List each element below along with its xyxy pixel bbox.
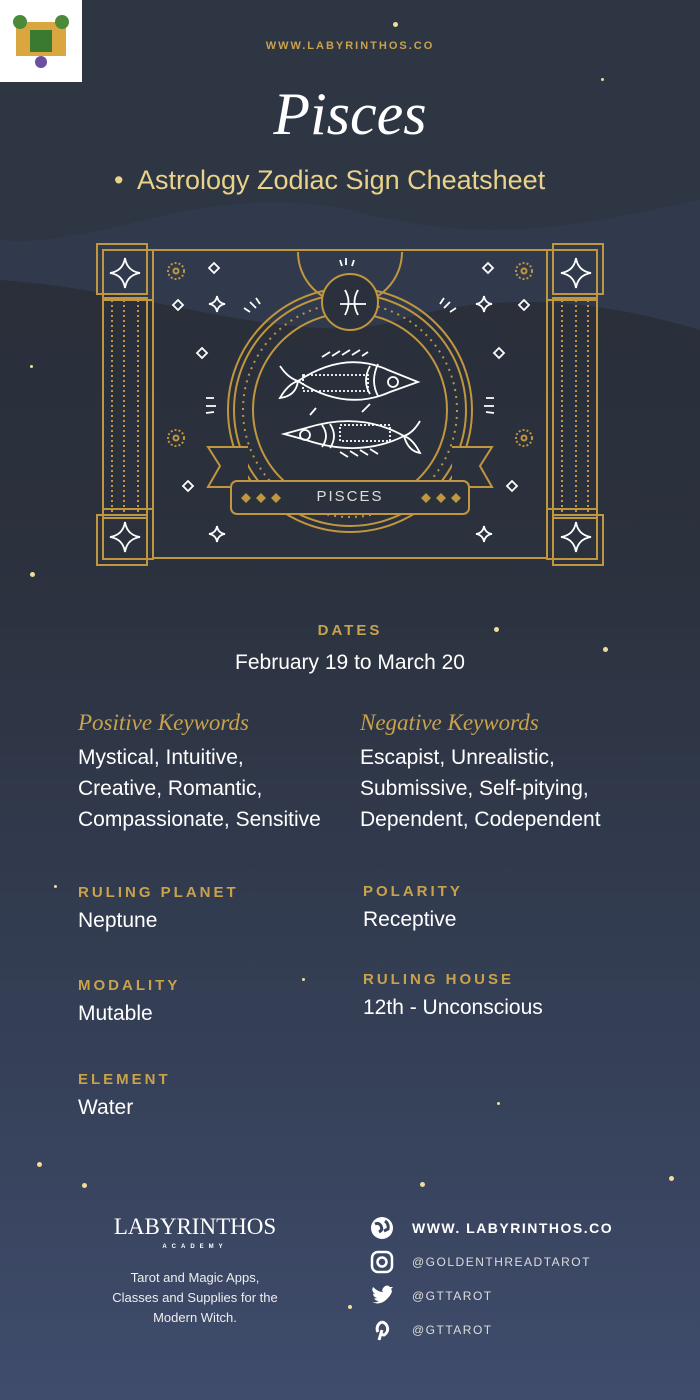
footer brand: ACADEMY [162, 1244, 228, 1250]
modality [78, 977, 180, 1025]
ruling planet [78, 884, 239, 932]
ruling house: RULING HOUSE [363, 971, 514, 988]
modality: Mutable [78, 1002, 153, 1025]
polarity: POLARITY [363, 883, 463, 900]
footer social links: @GOLDENTHREADTAROT [412, 1255, 591, 1269]
modality: MODALITY [78, 977, 180, 994]
ruling planet: Neptune [78, 909, 157, 932]
footer brand: Tarot and Magic Apps, [131, 1270, 259, 1285]
footer brand: Modern Witch. [153, 1310, 237, 1325]
footer social links: @GTTAROT [412, 1323, 493, 1337]
element: ELEMENT [78, 1071, 171, 1088]
ruling planet: RULING PLANET [78, 884, 239, 901]
element: Water [78, 1096, 133, 1119]
decorative dots [393, 22, 398, 27]
footer brand: LABYRINTHOS [114, 1214, 276, 1239]
banner label: PISCES [316, 488, 384, 505]
footer brand [112, 1214, 278, 1325]
negative keywords [360, 710, 601, 831]
positive keywords: Mystical, Intuitive, [78, 746, 244, 769]
ruling house [363, 971, 543, 1019]
positive keywords: Creative, Romantic, [78, 777, 262, 800]
dates [235, 622, 465, 674]
site url: WWW.LABYRINTHOS.CO [266, 40, 434, 52]
footer brand: Classes and Supplies for the [112, 1290, 278, 1305]
negative keywords: Dependent, Codependent [360, 808, 601, 831]
positive keywords: Compassionate, Sensitive [78, 808, 321, 831]
ruling house: 12th - Unconscious [363, 996, 543, 1019]
footer social links: WWW. LABYRINTHOS.CO [412, 1220, 613, 1236]
illustration: pisces frame [96, 243, 604, 566]
negative keywords: Submissive, Self-pitying, [360, 777, 589, 800]
element [78, 1071, 171, 1119]
dates: February 19 to March 20 [235, 651, 465, 674]
title: Pisces [273, 81, 427, 147]
polarity [363, 883, 463, 931]
negative keywords: Negative Keywords [360, 710, 539, 735]
subtitle: • Astrology Zodiac Sign Cheatsheet [114, 165, 545, 195]
footer social links: @GTTAROT [412, 1289, 493, 1303]
positive keywords: Positive Keywords [78, 710, 249, 735]
logo badge [0, 0, 82, 82]
polarity: Receptive [363, 908, 456, 931]
positive keywords [78, 710, 321, 831]
dates: DATES [318, 622, 382, 639]
negative keywords: Escapist, Unrealistic, [360, 746, 555, 769]
footer social links [370, 1217, 613, 1340]
